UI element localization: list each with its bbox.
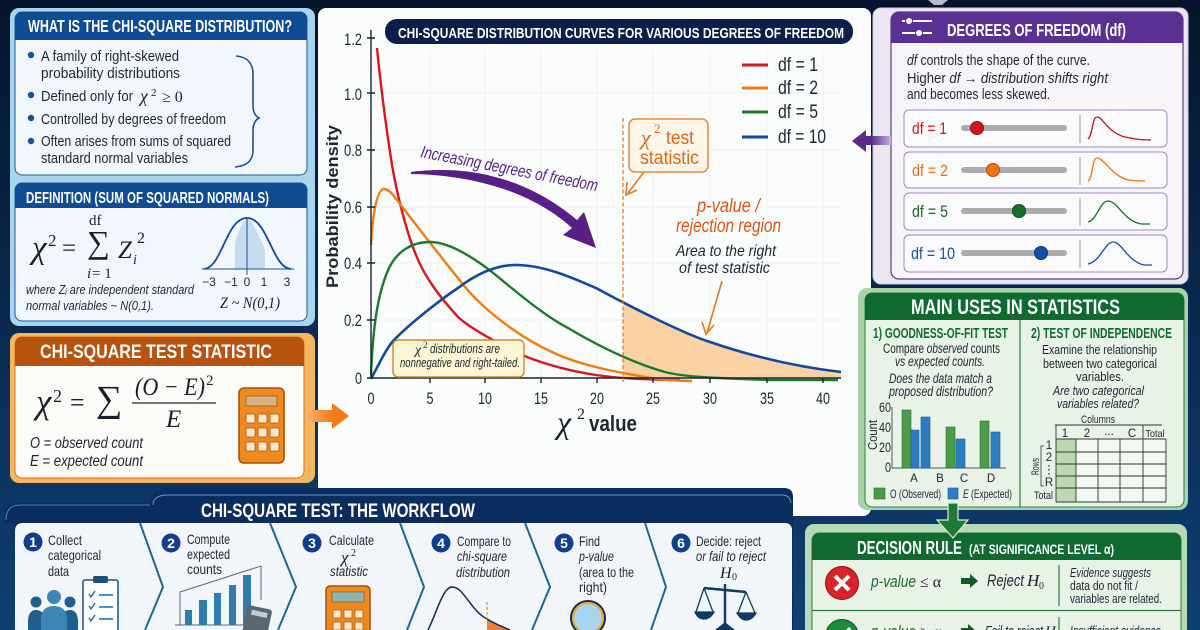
arrow: to region [702, 281, 722, 334]
heading: DECISION RULE [857, 538, 962, 558]
x tick labels [368, 389, 830, 408]
panel: degrees of freedom: DEGREES OF FREEDOM (df) [947, 20, 1126, 40]
section: test of independence: variables. [1076, 369, 1124, 384]
mini normal curve: 3 [284, 275, 291, 289]
icon: calculator [326, 586, 370, 630]
step 2: counts [187, 561, 222, 577]
note box: χ [413, 343, 422, 358]
panel: chi-square test statistic: O = observed count [30, 435, 144, 452]
y tick labels: 0.6 [344, 198, 362, 217]
label: p-value [675, 196, 781, 277]
x tick labels: 5 [426, 389, 434, 408]
row: fail to reject [826, 617, 1161, 630]
panel: chi-square test statistic: CHI-SQUARE TEST STATISTIC [40, 341, 272, 363]
panel: chi-square test statistic [10, 333, 315, 483]
step 3: 3 [308, 535, 316, 551]
y tick labels [344, 30, 362, 388]
x tick labels: 20 [590, 389, 604, 408]
x tick labels: 25 [646, 389, 660, 408]
panel: what is the chi-square distribution [15, 12, 307, 175]
section: test of independence [1030, 326, 1172, 502]
panel: what is the chi-square distribution: ≥ 0 [162, 89, 183, 106]
step 3 [302, 532, 374, 630]
row: reject: 0 [1039, 581, 1044, 592]
section: goodness-of-fit: 1) GOODNESS-OF-FIT TEST [873, 326, 1008, 342]
row: df = 1 [904, 110, 1167, 147]
legend: df = 5 [778, 102, 818, 123]
mini normal curve: −3 [202, 275, 216, 289]
panel: definition: normal variables ~ N(0,1). [26, 299, 154, 313]
arrow: callout to line [626, 172, 644, 195]
icon: sliders [902, 18, 932, 36]
mini normal curve: 0 [244, 275, 251, 289]
step 2: expected [187, 546, 230, 562]
panel: what is the chi-square distribution: probability distributions [41, 65, 180, 82]
panel: definition: DEFINITION (SUM OF SQUARED NORMALS) [26, 190, 269, 207]
bar chart: E (Expected) [963, 487, 1012, 501]
bar chart: A [910, 473, 918, 485]
mini normal curve: −1 [224, 275, 238, 289]
y tick labels: 0.2 [344, 311, 362, 330]
bar chart: B [936, 473, 944, 485]
contingency table: R [1045, 477, 1053, 489]
curve: df = 5 [371, 242, 838, 380]
step 2: Compute [187, 531, 230, 547]
formula: 2 [137, 230, 145, 247]
callout: test statistic: χ [639, 125, 652, 150]
arrow: increasing df [411, 170, 596, 248]
step 1: categorical [48, 547, 101, 563]
panel: definition [15, 183, 307, 321]
step 5: p-value [578, 548, 614, 564]
row: df = 5: df = 5 [912, 202, 948, 221]
callout: test statistic: test [666, 128, 695, 149]
formula: 2 [53, 386, 62, 406]
mini normal curve [202, 218, 294, 312]
contingency table: 1 [1046, 440, 1052, 452]
row: df = 1: df = 1 [912, 119, 947, 138]
legend: df = 10 [778, 127, 826, 148]
panel: what is the chi-square distribution: Controlled by degrees of freedom [41, 111, 226, 128]
row: df = 2: df = 2 [912, 161, 948, 180]
step 1: data [48, 563, 69, 579]
row: reject: Evidence suggests [1070, 565, 1151, 580]
formula: χ [33, 382, 53, 421]
formula: E [165, 406, 181, 433]
arrow: statistic to chart [307, 403, 349, 429]
formula [29, 213, 145, 282]
x tick labels: 0 [368, 389, 374, 408]
contingency table: Total [1146, 428, 1164, 440]
contingency table: Rows [1030, 458, 1042, 475]
formula: = [70, 388, 85, 417]
note box [393, 340, 524, 377]
section: goodness-of-fit [866, 326, 1012, 501]
step 3: χ [339, 548, 349, 567]
formula: χ [29, 230, 48, 266]
contingency table: C [1128, 428, 1136, 440]
x tick labels: 15 [534, 389, 548, 408]
legend: df = 2 [778, 78, 818, 99]
panel: degrees of freedom: df controls the shape of the curve. [907, 53, 1090, 69]
contingency table: Columns [1081, 414, 1115, 426]
shaded rejection region [623, 302, 841, 378]
panel: what is the chi-square distribution: Often arises from sums of squared [41, 133, 231, 150]
bar chart: 60 [879, 400, 891, 415]
icon: people [28, 590, 78, 630]
y tick labels: 1.0 [344, 85, 362, 104]
icon: magnifier [571, 601, 605, 630]
section: test of independence: Are two categorical [1052, 383, 1145, 398]
test statistic line [622, 118, 624, 382]
y axis title: Probability density [323, 124, 342, 288]
section: test of independence: between two categorical [1043, 356, 1157, 371]
row: reject: Reject [987, 571, 1025, 590]
contingency table: ... [1104, 426, 1114, 438]
formula: 2 [48, 231, 56, 250]
heading [857, 538, 1114, 558]
bar chart [866, 400, 1012, 501]
section: goodness-of-fit: Compare observed counts [883, 341, 1000, 356]
section: goodness-of-fit: proposed distribution? [888, 384, 993, 399]
step 4: Compare to [457, 533, 511, 549]
step 4: 4 [437, 535, 445, 551]
x axis title [554, 404, 637, 440]
step 6: or fail to reject [696, 548, 767, 564]
step 6: 0 [732, 572, 737, 583]
step 5: right) [579, 579, 607, 595]
icon: clipboard [83, 576, 118, 630]
formula: ∑ [87, 224, 110, 260]
formula: i [87, 266, 91, 282]
contingency table [1030, 414, 1166, 502]
formula: (O − E) [135, 374, 205, 401]
contingency table: ⋮ [1043, 464, 1055, 476]
label: p-value: rejection region [676, 216, 781, 237]
contingency table: Total [1034, 490, 1053, 502]
mini normal curve: Z ~ N(0,1) [220, 295, 280, 312]
bar chart: D [987, 473, 995, 485]
step 2 [162, 531, 272, 630]
panel: what is the chi-square distribution: A family of right-skewed [41, 48, 179, 65]
panel: chart [318, 8, 871, 516]
step 3: 2 [351, 548, 356, 559]
row: reject: H [1026, 571, 1041, 590]
contingency table: 2 [1084, 428, 1090, 440]
y tick labels: 0 [355, 369, 362, 388]
row: reject: variables are related. [1070, 591, 1162, 606]
row: reject: data do not fit / [1070, 578, 1138, 593]
x tick labels: 10 [478, 389, 492, 408]
panel: what is the chi-square distribution: Defined only for [41, 88, 133, 105]
note box: 2 [423, 340, 428, 350]
label: p-value: Area to the right [675, 243, 776, 260]
panel: chi-square test workflow [5, 488, 793, 630]
panel: chi-square test workflow: CHI-SQUARE TEST: THE WORKFLOW [201, 501, 475, 522]
section: goodness-of-fit: vs expected counts. [895, 354, 985, 369]
step 1 [24, 532, 118, 630]
panel: what is the chi-square distribution: WHAT IS THE CHI-SQUARE DISTRIBUTION? [28, 16, 292, 36]
formula: Z [118, 237, 133, 264]
step 2: 2 [167, 535, 175, 551]
formula: 2 [206, 373, 214, 389]
row: df = 10: df = 10 [911, 244, 955, 263]
legend: df = 1 [778, 55, 818, 76]
mini normal curve: 1 [261, 275, 268, 289]
step 6: H [719, 565, 733, 582]
legend [742, 55, 826, 148]
step 5 [554, 533, 634, 630]
callout: test statistic: 2 [654, 121, 660, 136]
callout: test statistic: statistic [640, 148, 699, 169]
x tick labels: 30 [703, 389, 717, 408]
step 1: 1 [29, 534, 37, 550]
callout: test statistic [629, 119, 708, 172]
formula: = 1 [92, 266, 112, 282]
formula: ∑ [96, 379, 122, 420]
row: reject [826, 565, 1162, 606]
note box: distributions are [430, 342, 500, 356]
formula: df [89, 213, 102, 229]
step 4 [428, 533, 511, 630]
icon: mini distribution [428, 587, 510, 630]
row: df = 2 [904, 152, 1167, 188]
icon: calculator [239, 388, 284, 463]
step 5: Find [579, 533, 600, 549]
step 6: 6 [677, 535, 685, 551]
formula: = [62, 235, 76, 262]
y tick labels: 0.8 [344, 141, 362, 160]
section: test of independence: variables related? [1057, 396, 1140, 411]
axes [367, 30, 841, 383]
y tick labels: 1.2 [344, 30, 362, 49]
y tick labels: 0.4 [344, 254, 362, 273]
panel: decision rule [805, 524, 1187, 630]
icon: bars with calculator [175, 566, 272, 630]
bar chart: 40 [879, 420, 891, 435]
panel: main uses in statistics: MAIN USES IN STATISTICS [911, 295, 1120, 319]
row: reject: p-value [870, 572, 916, 591]
row: reject: ≤ α [920, 574, 942, 591]
heading: (AT SIGNIFICANCE LEVEL α) [969, 541, 1114, 557]
panel: definition: where Zᵢ are independent standard [26, 283, 195, 297]
panel: main uses in statistics [858, 288, 1188, 510]
icon: scales [695, 584, 756, 630]
label: increasing degrees of freedom: Increasing degrees of freedom [419, 142, 600, 195]
panel: what is the chi-square distribution: standard normal variables [41, 150, 188, 167]
arrow: uses to decision [937, 503, 968, 538]
row: df = 5 [904, 193, 1167, 230]
contingency table: 1 [1062, 428, 1068, 440]
label: p-value: p-value / [696, 196, 761, 217]
formula: i [133, 253, 137, 268]
step 6: Decide: reject [696, 533, 761, 549]
panel: what is the chi-square distribution: χ [138, 86, 149, 106]
step 5: 5 [560, 535, 568, 551]
chart title: CHI-SQUARE DISTRIBUTION CURVES FOR VARIOUS DEGREES OF FREEDOM [398, 25, 844, 42]
label: p-value: of test statistic [679, 260, 770, 277]
step 6 [672, 533, 767, 630]
step 4: chi-square [457, 548, 507, 564]
bar chart: C [960, 473, 968, 485]
contingency table: 2 [1046, 452, 1052, 464]
bar chart: Count [866, 420, 880, 450]
row: df = 10 [904, 235, 1167, 272]
step 3: statistic [330, 563, 368, 579]
x axis title: 2 [577, 406, 585, 423]
panel: what is the chi-square distribution: 2 [151, 87, 156, 99]
step 5: (area to the [579, 564, 634, 580]
panel: degrees of freedom: and becomes less skewed. [907, 87, 1050, 103]
panel: chi-square test statistic: E = expected count [30, 453, 144, 470]
step 4: distribution [456, 564, 510, 580]
x tick labels: 40 [816, 389, 830, 408]
icon: cross [826, 566, 858, 600]
arrow: df panel to chart [852, 130, 891, 152]
formula [33, 373, 216, 433]
panel: degrees of freedom: Higher df → distribution shifts right [907, 71, 1109, 87]
x axis title: χ [554, 404, 572, 440]
x tick labels: 35 [760, 389, 774, 408]
chart title [385, 19, 853, 44]
step 1: Collect [48, 532, 82, 548]
curve: df = 2 [371, 189, 692, 381]
bar chart: 20 [879, 440, 891, 455]
bar chart: 0 [885, 460, 891, 475]
bar chart: O (Observed) [890, 487, 941, 501]
x axis title: value [589, 411, 637, 436]
note box: nonnegative and right-tailed. [400, 356, 520, 370]
step 3: Calculate [329, 532, 374, 548]
curve: df = 10 [371, 265, 841, 379]
section: test of independence: Examine the relationship [1042, 342, 1157, 357]
brace [235, 56, 259, 167]
panel: degrees of freedom [873, 8, 1188, 284]
panel: what is chi-square + definition [10, 8, 315, 326]
section: goodness-of-fit: Does the data match a [889, 371, 992, 386]
curve: df = 1 [377, 48, 680, 380]
